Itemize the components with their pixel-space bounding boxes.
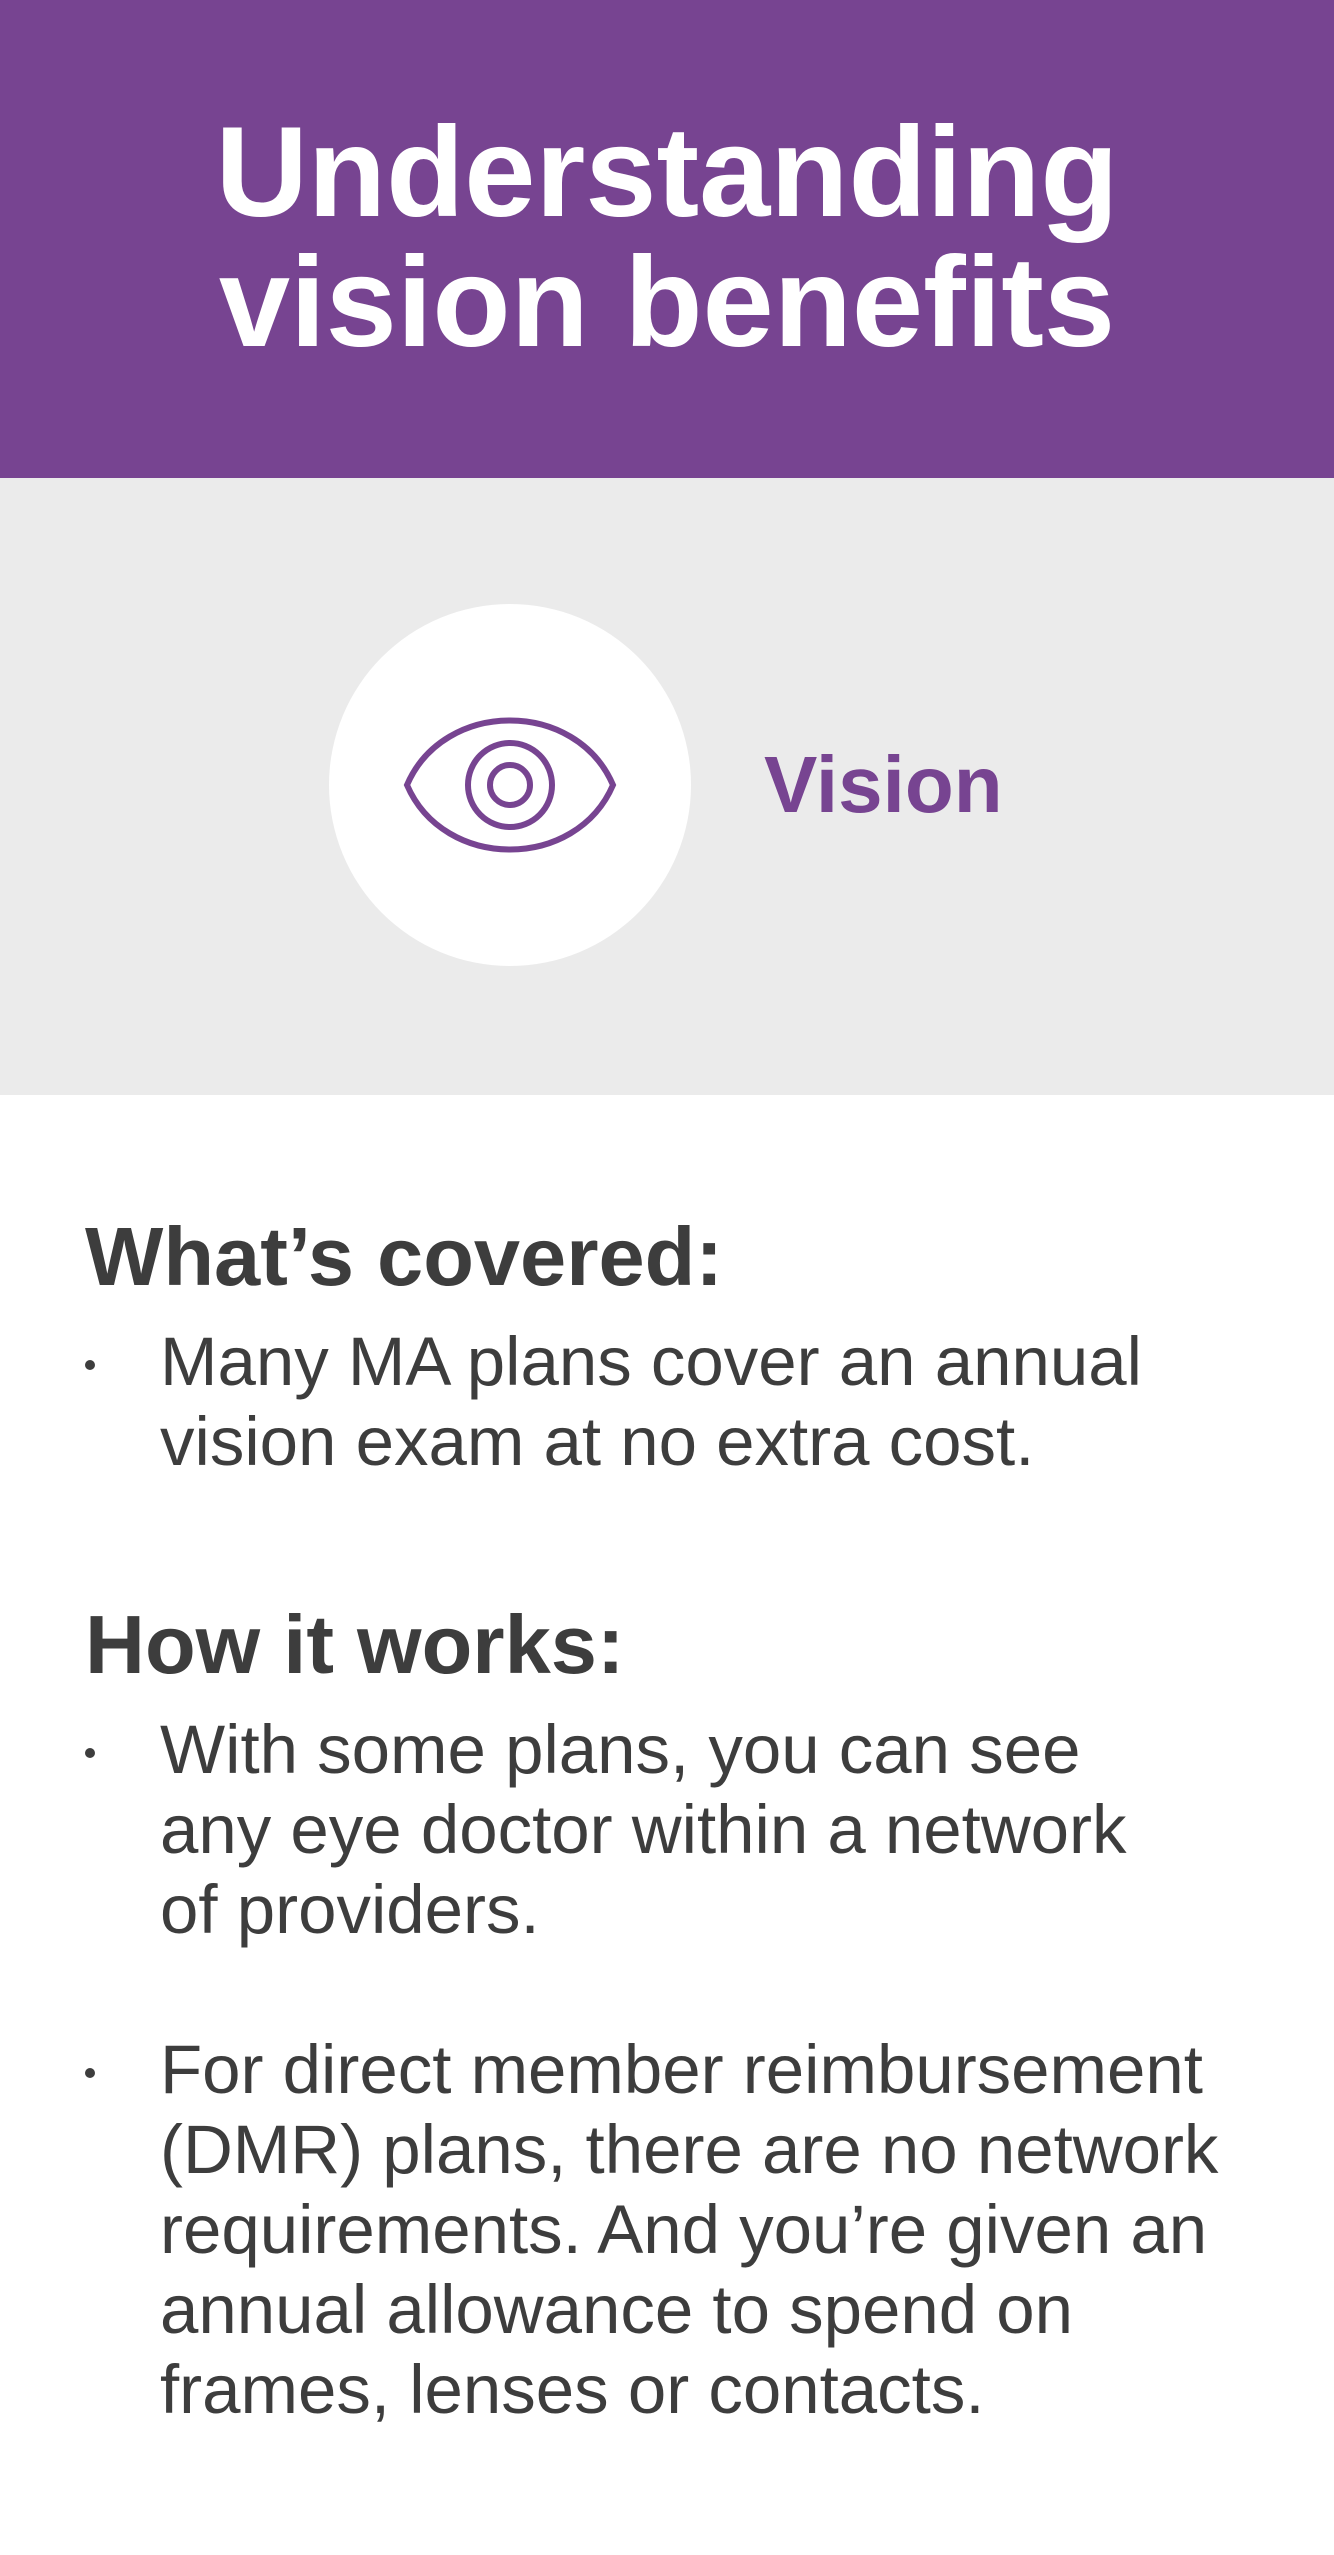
text block: how it works bullets: For direct member reimbursement xyxy=(160,2031,1203,2108)
text block: covered bullet: vision exam at no extra cost. xyxy=(160,1403,1034,1480)
title: Understanding xyxy=(215,101,1119,244)
icon: eye in circle xyxy=(329,604,691,966)
text block: how it works bullets: requirements. And you’re given an xyxy=(160,2191,1207,2268)
text block: how it works bullets: of providers. xyxy=(160,1871,540,1948)
text block: how it works bullets: frames, lenses or contacts. xyxy=(160,2351,984,2428)
text block: how it works bullets: annual allowance to spend on xyxy=(160,2271,1073,2348)
title xyxy=(215,101,1119,374)
text block: how it works bullets: any eye doctor within a network xyxy=(160,1791,1127,1868)
heading: how it works: How it works: xyxy=(85,1598,625,1691)
heading: what's covered: What’s covered: xyxy=(85,1210,723,1303)
text block: covered bullet xyxy=(85,1323,1142,1480)
label: Vision: Vision xyxy=(764,740,1003,829)
text block: how it works bullets xyxy=(85,1711,1218,2428)
text block: covered bullet: Many MA plans cover an annual xyxy=(160,1323,1142,1400)
header panel xyxy=(0,0,1334,478)
text block: how it works bullets: With some plans, you can see xyxy=(160,1711,1080,1788)
text block: how it works bullets: (DMR) plans, there are no network xyxy=(160,2111,1218,2188)
panel: vision band xyxy=(0,478,1334,1095)
title: vision benefits xyxy=(219,231,1115,374)
